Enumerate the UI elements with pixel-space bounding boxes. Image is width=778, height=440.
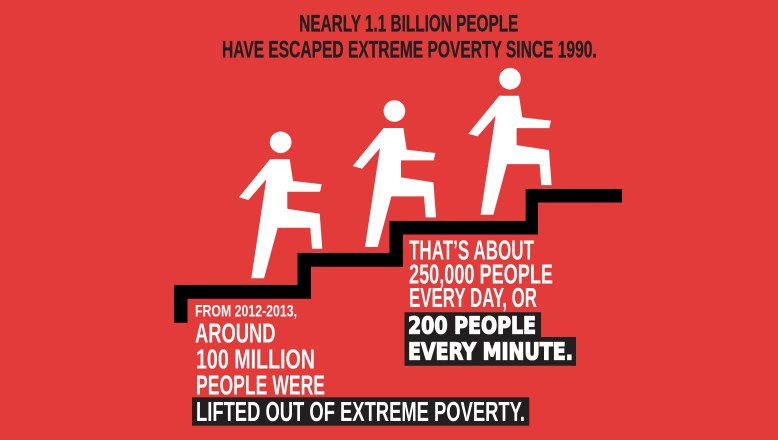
icon: climbing person 2 <box>353 100 436 247</box>
title: NEARLY 1.1 BILLION PEOPLE <box>299 11 518 38</box>
highlight: 200 people every minute: 200 PEOPLE <box>408 314 536 340</box>
highlight: 200 people every minute: EVERY MINUTE. <box>408 339 573 365</box>
title <box>222 11 597 63</box>
text block: daily statistic: EVERY DAY, OR <box>409 282 537 313</box>
icon: climbing person 1 <box>239 132 322 278</box>
text block: daily statistic: THAT’S ABOUT <box>409 235 534 266</box>
text block: 2012-2013 statistic: 100 MILLION <box>196 343 315 374</box>
text block: 2012-2013 statistic: PEOPLE WERE <box>196 369 325 400</box>
highlight: lifted out of extreme poverty <box>192 396 529 427</box>
text block: 2012-2013 statistic <box>192 302 529 427</box>
highlight: lifted out of extreme poverty: LIFTED OUT OF EXTREME POVERTY. <box>196 396 525 427</box>
highlight: 200 people every minute <box>404 312 576 366</box>
text block: 2012-2013 statistic: AROUND <box>195 318 276 348</box>
text block: 2012-2013 statistic: FROM 2012-2013, <box>195 302 297 321</box>
staircase <box>174 189 622 323</box>
text block: daily statistic: 250,000 PEOPLE <box>409 259 553 290</box>
text block: daily statistic <box>409 235 553 313</box>
icon: climbing person 3 <box>468 68 552 215</box>
